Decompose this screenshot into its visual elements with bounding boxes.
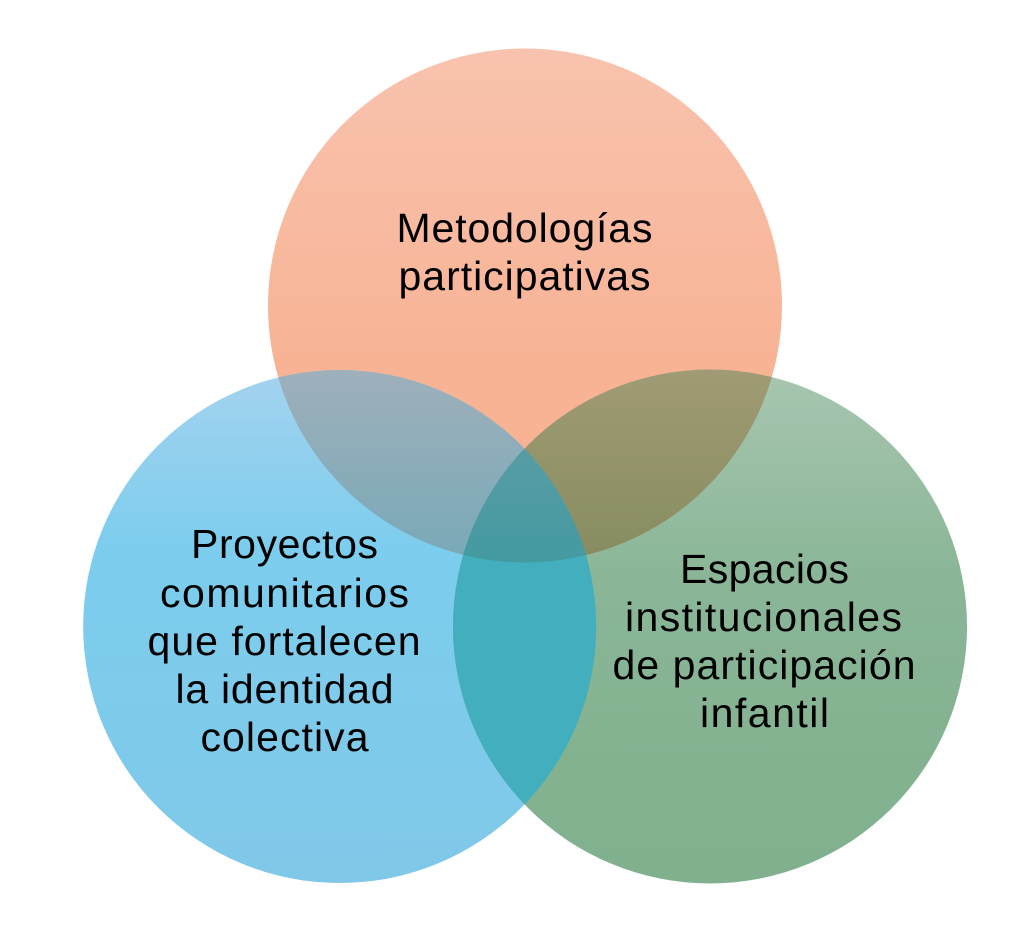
overlap: left and right — [453, 448, 596, 804]
label: Proyectos comunitarios que fortalecen la identidad colectiva: colectiva — [200, 714, 369, 760]
venn diagram — [83, 48, 967, 884]
label: Proyectos comunitarios que fortalecen la identidad colectiva: la identidad — [176, 666, 394, 712]
label: Espacios institucionales de participación infantil: infantil — [700, 690, 829, 736]
label: Metodologías participativas: Metodologías — [396, 205, 652, 251]
label: Proyectos comunitarios que fortalecen la identidad colectiva: comunitarios — [160, 570, 409, 616]
circle: Proyectos comunitarios — [83, 370, 596, 883]
label: Metodologías participativas — [396, 205, 652, 299]
overlap: top and left — [278, 370, 524, 555]
label: Metodologías participativas: participativas — [398, 253, 650, 299]
overlap: top and right — [463, 370, 772, 555]
label: Espacios institucionales de participación infantil: de participación — [612, 642, 916, 688]
label: Proyectos comunitarios que fortalecen la identidad colectiva — [148, 521, 420, 760]
label: Proyectos comunitarios que fortalecen la identidad colectiva: Proyectos — [191, 521, 378, 567]
label: Espacios institucionales de participación infantil: institucionales — [625, 594, 902, 640]
circle: Metodologías participativas — [268, 48, 782, 562]
label: Espacios institucionales de participación infantil — [612, 546, 916, 736]
label: Espacios institucionales de participación infantil: Espacios — [680, 546, 849, 592]
overlap: center — [463, 449, 586, 562]
circle: Espacios institucionales — [453, 370, 967, 884]
label: Proyectos comunitarios que fortalecen la identidad colectiva: que fortalecen — [148, 618, 420, 664]
